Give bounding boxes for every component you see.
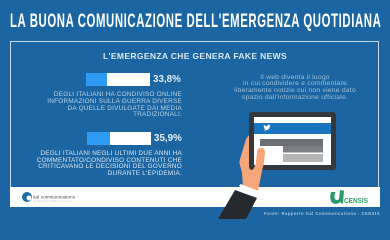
text block: second statistic [37, 150, 182, 177]
text block: second statistic: COMMENTATO/CONDIVISO CONTENUTI CHE [37, 157, 182, 164]
icon: thumb [244, 148, 265, 191]
text block: web callout: Il web diventa il luogo [260, 74, 330, 80]
text block: second statistic: DEGLI ITALIANI NEGLI ULTIMI DUE ANNI HA [40, 150, 182, 157]
panel: main frame [10, 41, 379, 187]
logo: ital communications [22, 192, 76, 202]
bar: 35,9% [87, 132, 151, 144]
source note: Fonte: Rapporto Ital Communications - CENSIS [264, 210, 380, 216]
text block: second statistic: DURANTE L'EPIDEMIA. [108, 170, 182, 177]
text block: first statistic: TRADIZIONALI. [133, 111, 182, 118]
text block: first statistic: DA QUELLE DIVULGATE DAI MEDIA [68, 105, 182, 112]
panel: white logo strip [10, 187, 380, 207]
value: 33,8%: 33,8% [153, 74, 181, 85]
logo: Censis [330, 190, 368, 205]
title: LA BUONA COMUNICAZIONE DELL'EMERGENZA QUOTIDIANA [10, 11, 381, 32]
text block: web callout: in cui condividere e commentare [243, 80, 347, 87]
icon: sleeve [218, 184, 259, 219]
text block: web callout: liberamente notizie cui non viene dato [234, 87, 356, 94]
icon: hand palm [239, 135, 262, 191]
text block: first statistic [47, 91, 182, 118]
logo: Censis: CENSIS [344, 198, 368, 205]
text block: second statistic: CRITICAVANO LE DECISIONI DEL GOVERNO [38, 163, 182, 170]
text block: web callout [234, 74, 356, 101]
text block: first statistic: DEGLI ITALIANI HA CONDIVISO ONLINE [54, 91, 182, 98]
value: 35,9%: 35,9% [154, 133, 182, 144]
text block: first statistic: INFORMAZIONI SULLA GUERRA DIVERSE [47, 98, 182, 105]
text block: web callout: spazio dall'informazione ufficiale. [242, 94, 348, 101]
logo: ital communications: ital communications [33, 194, 76, 200]
panel heading: L'EMERGENZA CHE GENERA FAKE NEWS [103, 51, 287, 61]
bar: 33,8% [86, 73, 150, 86]
icon: tablet [249, 112, 336, 170]
logo: ital communications: integrated communications [33, 200, 71, 202]
